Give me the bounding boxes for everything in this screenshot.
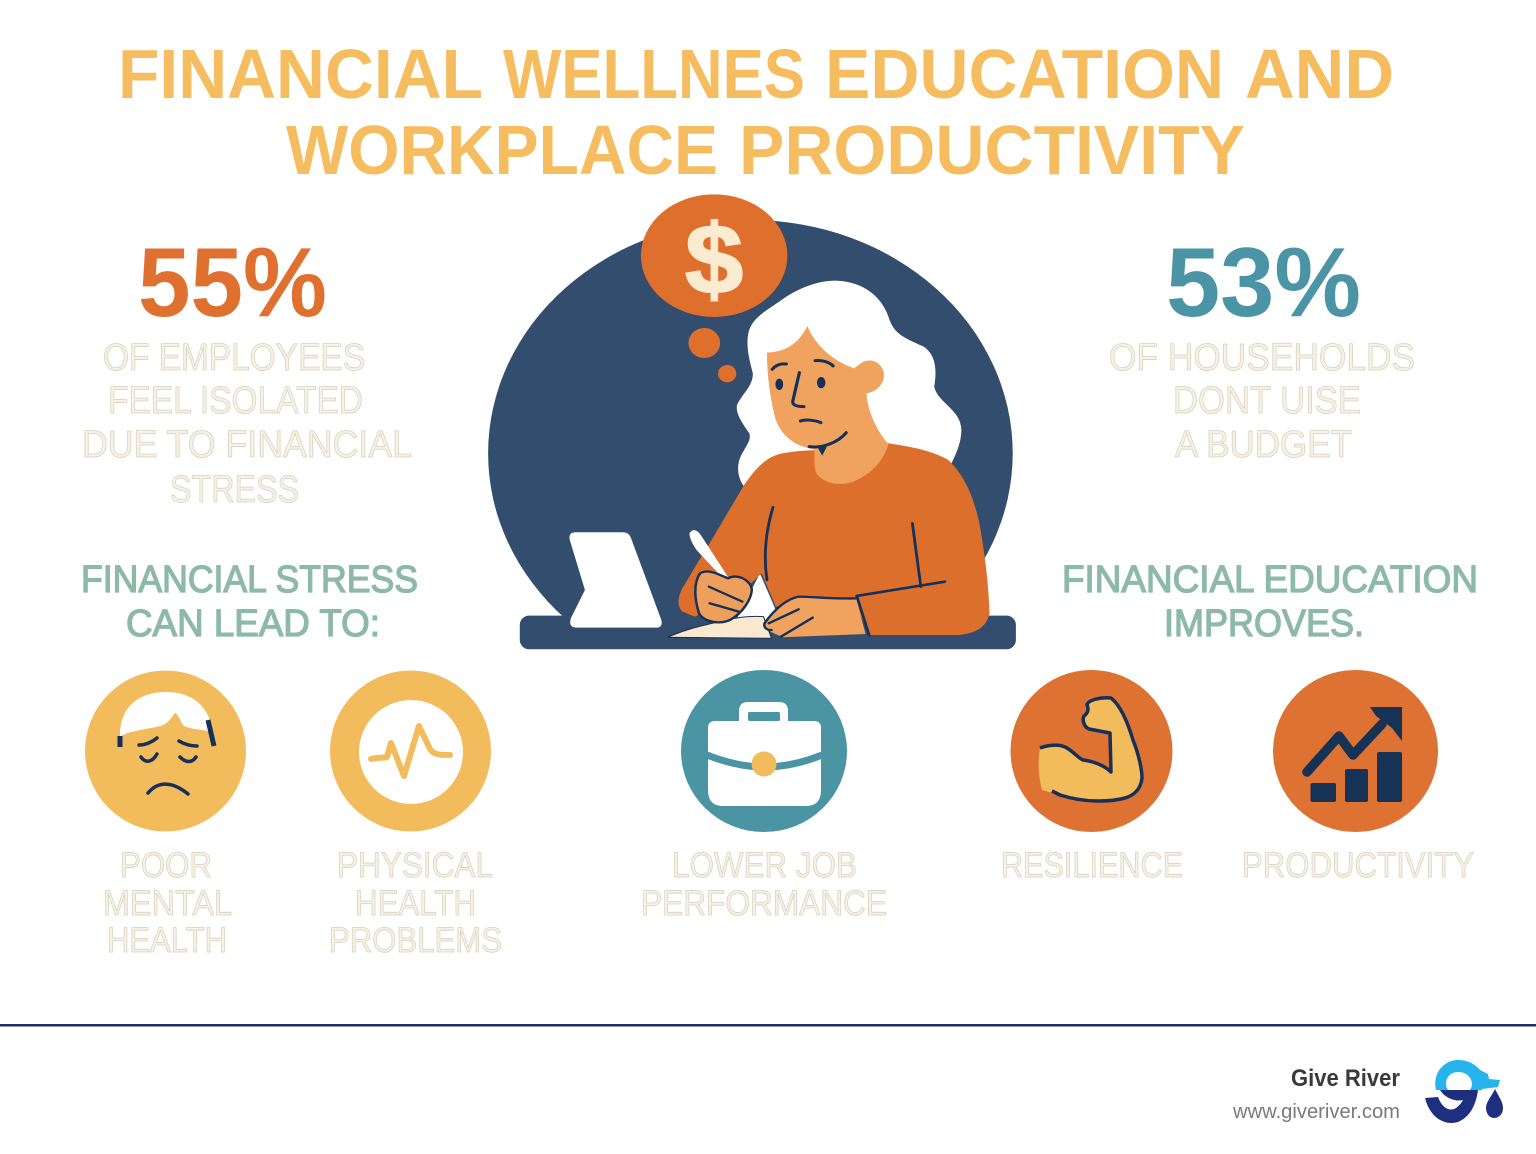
label: physical health problems xyxy=(329,846,502,960)
text: households budget: A BUDGET xyxy=(1175,424,1352,466)
right hand xyxy=(764,597,866,637)
heading: financial education: IMPROVES. xyxy=(1164,603,1364,645)
left hand xyxy=(695,571,752,622)
hair xyxy=(737,281,961,490)
heading: financial education: FINANCIAL EDUCATION xyxy=(1062,559,1478,601)
desk xyxy=(520,616,1016,649)
icon: physical health xyxy=(330,670,491,832)
footer divider xyxy=(0,1024,1536,1026)
icon: muscle arm xyxy=(1010,670,1172,832)
text: employees isolated: DUE TO FINANCIAL xyxy=(82,424,412,466)
label: lower job performance: PERFORMANCE xyxy=(641,884,887,923)
white gap beside arm xyxy=(737,573,776,620)
heading: financial stress xyxy=(81,559,418,645)
label: poor mental health xyxy=(103,846,232,960)
thought bubble xyxy=(641,194,787,317)
sweater lines xyxy=(765,507,945,635)
label: productivity: PRODUCTIVITY xyxy=(1242,846,1474,885)
eyebrows, eyes, nose, mouth xyxy=(772,361,846,456)
logo xyxy=(1425,1060,1503,1123)
icon: growth chart xyxy=(1273,670,1438,832)
title: AND xyxy=(1245,35,1394,113)
title: PRODUCTIVITY xyxy=(739,111,1245,189)
skin: neck and face xyxy=(767,326,888,484)
text: households budget: DONT UISE xyxy=(1173,380,1361,422)
label: physical health problems: HEALTH xyxy=(355,884,476,923)
label: physical health problems: PROBLEMS xyxy=(329,921,502,960)
label: poor mental health: MENTAL xyxy=(103,884,232,923)
tablet xyxy=(569,532,662,628)
label: poor mental health: POOR xyxy=(120,846,212,885)
footer brand: Give River xyxy=(1291,1065,1400,1092)
title xyxy=(118,35,1394,189)
title: WELLNES xyxy=(503,35,805,113)
sweater xyxy=(678,443,989,635)
pen xyxy=(689,530,730,580)
dollar sign: $ xyxy=(685,204,743,314)
label: poor mental health: HEALTH xyxy=(107,921,227,960)
text: employees isolated: OF EMPLOYEES xyxy=(103,337,365,379)
dark circle background xyxy=(488,221,1013,616)
heading: financial stress: FINANCIAL STRESS xyxy=(81,559,418,601)
label: lower job performance xyxy=(641,846,887,923)
text: employees isolated xyxy=(82,337,412,511)
heading: financial education xyxy=(1062,559,1478,645)
icon: poor mental health xyxy=(85,670,246,832)
title: WORKPLACE xyxy=(286,111,718,189)
label: lower job performance: LOWER JOB xyxy=(672,846,857,885)
illustration: stressed woman at desk xyxy=(488,194,1016,687)
stat: 53%: 53% xyxy=(1166,227,1361,337)
label: physical health problems: PHYSICAL xyxy=(337,846,493,885)
title: EDUCATION xyxy=(825,35,1224,113)
text: households budget: OF HOUSEHOLDS xyxy=(1109,337,1415,379)
text: households budget xyxy=(1109,337,1415,466)
paper xyxy=(668,616,772,638)
footer brand: www.giveriver.com xyxy=(1232,1101,1400,1123)
footer brand xyxy=(1232,1065,1400,1123)
text: employees isolated: STRESS xyxy=(170,469,299,511)
stat: 55%: 55% xyxy=(138,227,327,337)
icon: briefcase xyxy=(681,670,847,832)
text: employees isolated: FEEL ISOLATED xyxy=(108,380,363,422)
title: FINANCIAL xyxy=(118,35,483,113)
heading: financial stress: CAN LEAD TO: xyxy=(126,603,380,645)
label: resilience: RESILIENCE xyxy=(1001,846,1183,885)
